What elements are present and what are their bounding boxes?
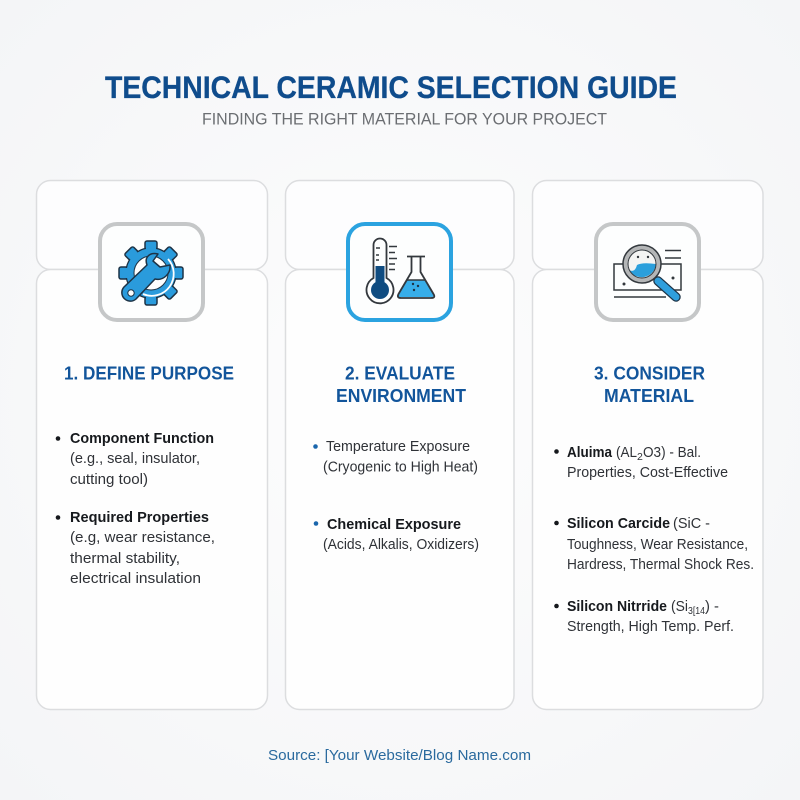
heading: evaluate environment bbox=[336, 362, 467, 406]
title: TECHNICAL CERAMIC SELECTION GUIDE bbox=[105, 69, 677, 105]
heading: consider material: 3. CONSIDER bbox=[594, 362, 705, 384]
heading: define purpose: 1. DEFINE PURPOSE bbox=[64, 362, 234, 384]
icon: magnifier over sample bbox=[596, 224, 699, 320]
bullet: temperature exposure: (Cryogenic to High Heat) bbox=[323, 458, 478, 476]
panel: evaluate environment bbox=[286, 180, 514, 710]
panel: define purpose bbox=[36, 180, 268, 710]
bullet: alumina: O3) - Bal. bbox=[643, 444, 701, 461]
bullet: alumina bbox=[554, 444, 728, 481]
bullet: alumina: (AL bbox=[616, 444, 637, 461]
bullet: component function bbox=[56, 430, 214, 488]
bullet: silicon nitride: (Si bbox=[671, 598, 688, 615]
bullet: chemical exposure: Chemical Exposure bbox=[327, 516, 461, 533]
bullet: alumina: Properties, Cost-Effective bbox=[567, 464, 728, 481]
bullet: component function: (e.g., seal, insulator, bbox=[70, 450, 200, 467]
heading: evaluate environment: ENVIRONMENT bbox=[336, 385, 467, 406]
bullet: silicon nitride: 3[14 bbox=[688, 605, 705, 617]
bullet: required properties: Required Properties bbox=[70, 509, 209, 526]
bullet: chemical exposure: (Acids, Alkalis, Oxidizers) bbox=[323, 536, 479, 553]
icon: gear and wrench bbox=[100, 224, 203, 320]
bullet: silicon carbide: Silicon Carcide bbox=[567, 515, 670, 532]
bullet: silicon carbide: Hardress, Thermal Shock Res. bbox=[567, 556, 754, 573]
bullet: temperature exposure: Temperature Exposure bbox=[326, 438, 470, 455]
bullet: component function: cutting tool) bbox=[70, 471, 148, 488]
heading: consider material bbox=[594, 362, 705, 406]
bullet: silicon nitride: Strength, High Temp. Perf. bbox=[567, 618, 734, 635]
bullet: temperature exposure bbox=[313, 438, 478, 476]
source line: Source: [Your Website/Blog Name.com bbox=[268, 747, 531, 764]
bullet: silicon carbide: Toughness, Wear Resistance, bbox=[567, 536, 748, 553]
heading: evaluate environment: 2. EVALUATE bbox=[345, 362, 455, 384]
bullet: silicon nitride: ) - bbox=[705, 598, 719, 615]
bullet: alumina: Aluima bbox=[567, 444, 613, 461]
icon: thermometer and flask bbox=[348, 224, 451, 320]
bullet: silicon nitride: Silicon Nitrride bbox=[567, 598, 667, 615]
bullet: silicon nitride bbox=[554, 598, 734, 635]
bullet: silicon carbide: (SiC - bbox=[673, 515, 710, 532]
bullet: silicon carbide bbox=[554, 515, 754, 573]
subtitle: FINDING THE RIGHT MATERIAL FOR YOUR PROJECT bbox=[202, 110, 607, 128]
bullet: required properties bbox=[56, 509, 215, 587]
panel: consider material bbox=[532, 180, 763, 710]
bullet: component function: Component Function bbox=[70, 430, 214, 447]
heading: consider material: MATERIAL bbox=[604, 385, 694, 406]
bullet: chemical exposure bbox=[314, 516, 479, 553]
bullet: alumina: 2 bbox=[637, 451, 643, 463]
bullet: required properties: (e.g, wear resistance, bbox=[70, 529, 215, 546]
bullet: required properties: thermal stability, bbox=[70, 550, 180, 567]
bullet: required properties: electrical insulation bbox=[70, 570, 201, 587]
